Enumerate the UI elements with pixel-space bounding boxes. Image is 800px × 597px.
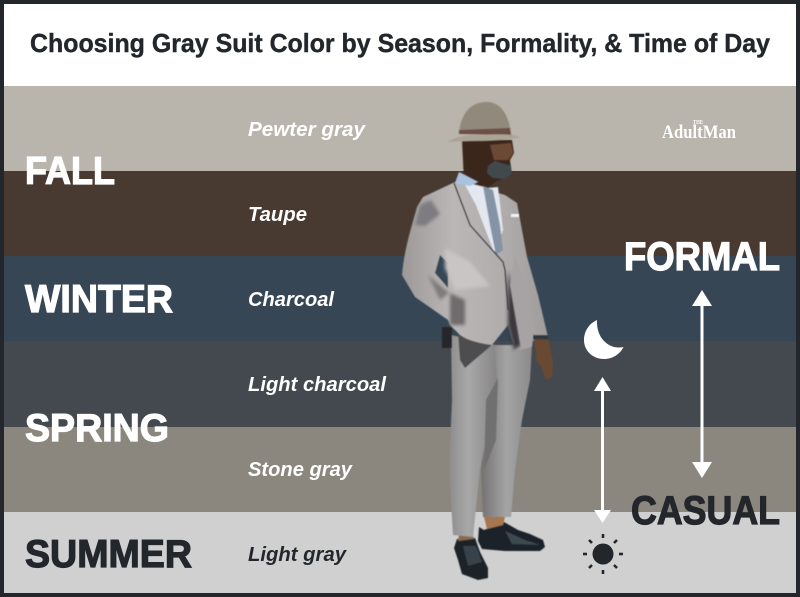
- jacket: [402, 182, 548, 351]
- axis label: formal: FORMAL: [624, 235, 780, 279]
- title: Choosing Gray Suit Color by Season, Formality, & Time of Day: [30, 28, 771, 58]
- left leg: [449, 335, 497, 537]
- suit color names: Pewter gray: [248, 119, 366, 141]
- neck and head: [462, 140, 514, 188]
- logo: The Adult Man: THE: [693, 120, 703, 126]
- icon: moon: [584, 320, 624, 359]
- right leg: [481, 345, 532, 517]
- season label: spring: SPRING: [25, 407, 169, 450]
- arrow: night to day: [594, 377, 611, 523]
- suit color names: Stone gray: [248, 459, 353, 481]
- season label: summer: SUMMER: [25, 533, 192, 576]
- shirt and tie: [459, 174, 503, 252]
- logo: The Adult Man: AdultMan: [662, 122, 736, 143]
- arrow: formal to casual: [692, 290, 712, 478]
- suit color names: Light charcoal: [248, 374, 386, 396]
- beard: [487, 161, 512, 179]
- season label: fall: FALL: [25, 150, 115, 193]
- suit color names: Taupe: [248, 204, 307, 226]
- figure: man in gray suit: [402, 102, 553, 580]
- icon: sun: [583, 534, 623, 574]
- shoes: [454, 517, 545, 580]
- trousers: [449, 333, 532, 537]
- season label: winter: WINTER: [25, 278, 173, 321]
- watch: [533, 335, 548, 340]
- suit color names: [248, 119, 386, 566]
- hat: [447, 102, 520, 142]
- axis label: casual: CASUAL: [631, 489, 780, 533]
- suit color names: Light gray: [248, 544, 347, 566]
- gap between arm and torso: [435, 255, 448, 288]
- suit color names: Charcoal: [248, 289, 334, 311]
- lapel lines and shadows: [454, 183, 508, 310]
- hand: [534, 337, 553, 380]
- title panel: [4, 4, 796, 86]
- hidden hand shadow: [442, 327, 452, 348]
